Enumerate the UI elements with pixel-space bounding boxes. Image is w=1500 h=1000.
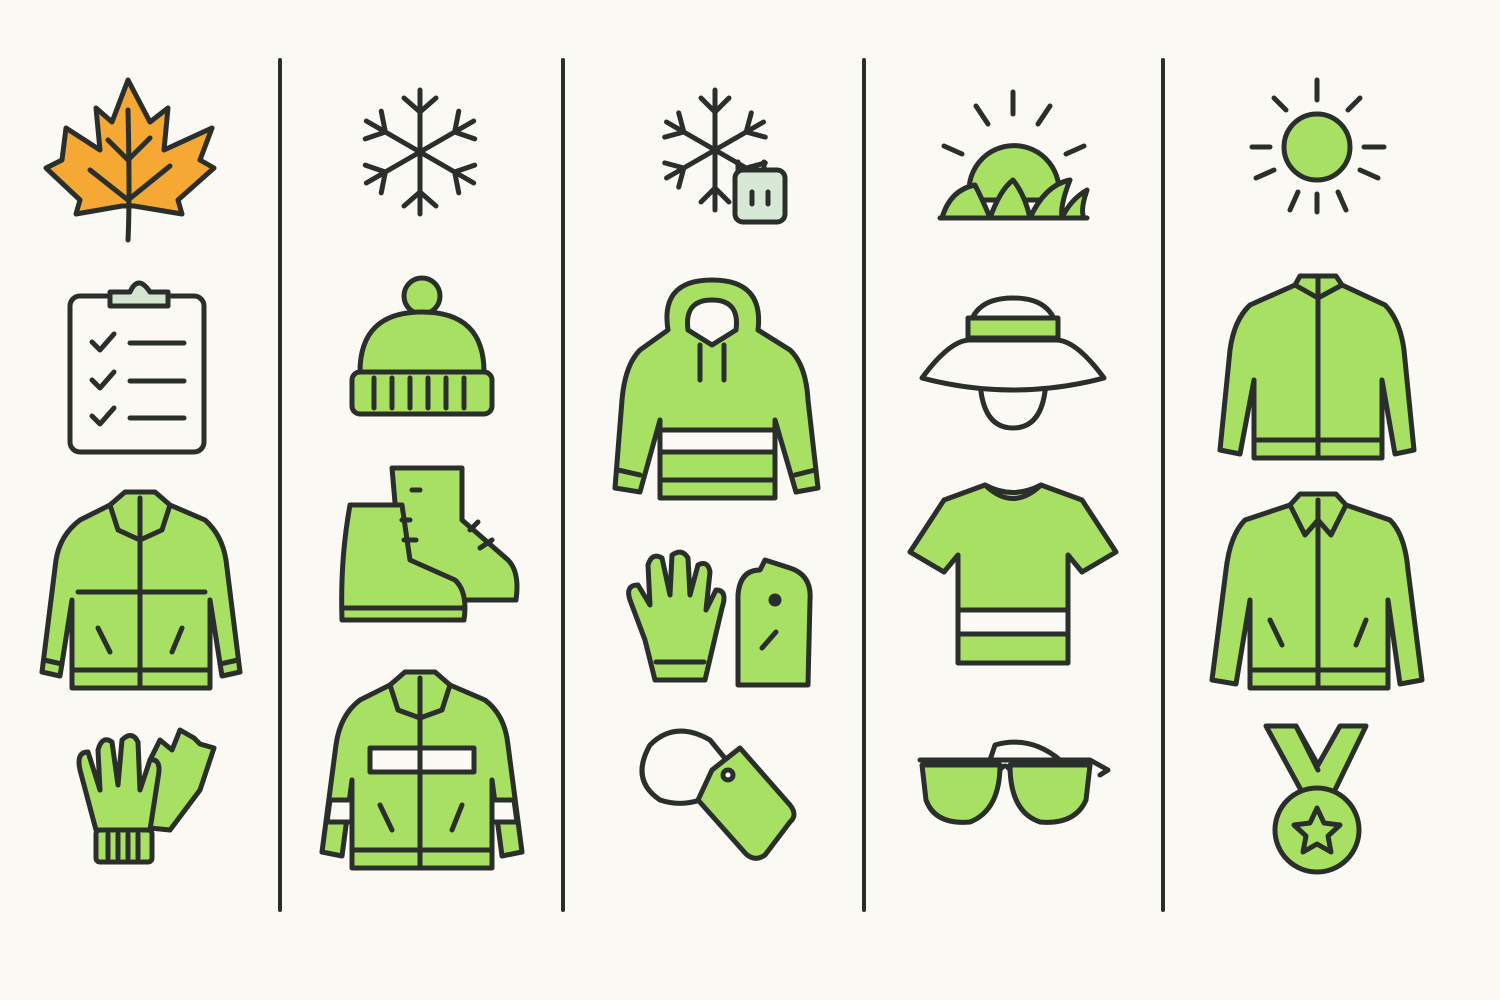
icon: snowflake bbox=[358, 90, 482, 214]
icon: collared jacket bbox=[1212, 494, 1422, 688]
icon: t-shirt bbox=[910, 485, 1116, 663]
icon: hi-vis jacket bbox=[322, 672, 522, 868]
icon: light jacket bbox=[1220, 276, 1414, 458]
icon: boots bbox=[342, 468, 517, 620]
icon: medal bbox=[1266, 726, 1366, 872]
icon: fleece jacket bbox=[42, 492, 240, 688]
icon: sunrise over grass bbox=[940, 92, 1087, 218]
icon: snowflake with plug bbox=[660, 90, 785, 222]
icon: tag bbox=[642, 731, 794, 858]
icon: sunglasses bbox=[920, 742, 1108, 822]
icon: glove and mitten bbox=[629, 552, 810, 685]
icon: maple leaf bbox=[46, 80, 214, 240]
icon: bucket hat bbox=[922, 298, 1104, 428]
icon: beanie bbox=[352, 278, 492, 414]
icon: clipboard checklist bbox=[70, 283, 204, 452]
icon: hoodie bbox=[615, 280, 818, 498]
icon: sun bbox=[1252, 80, 1384, 212]
icon: gloves bbox=[79, 730, 214, 862]
